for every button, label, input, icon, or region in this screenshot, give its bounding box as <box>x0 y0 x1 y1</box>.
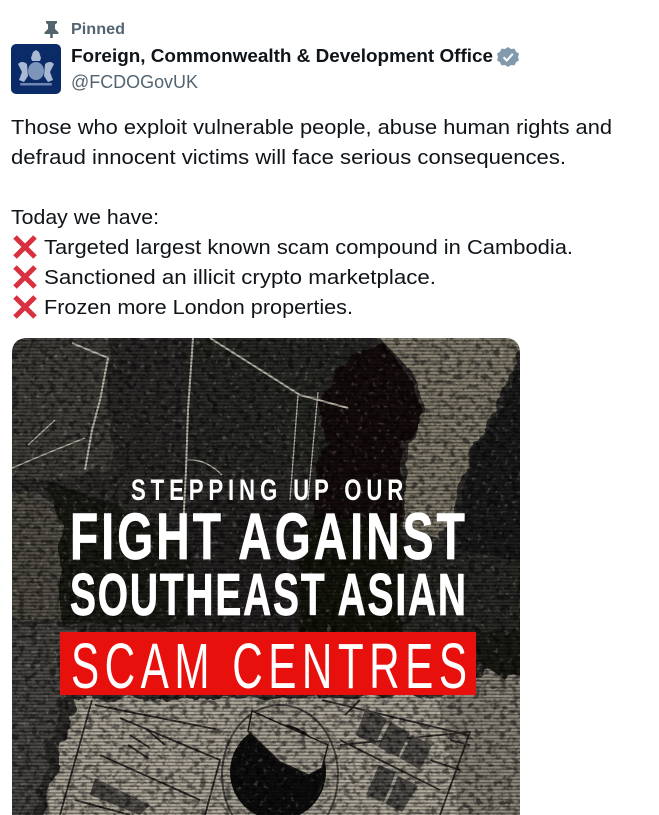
post text: defraud innocent victims will face serious consequences. <box>11 146 566 169</box>
island <box>248 711 328 775</box>
solar panels <box>356 708 432 812</box>
pinned label: Pinned <box>71 21 125 38</box>
ring road <box>222 705 338 815</box>
heading: stepping up our: STEPPING UP OUR <box>131 473 403 507</box>
icon: verified badge <box>497 47 519 67</box>
pond <box>230 724 326 815</box>
post text: Today we have: <box>11 206 159 229</box>
compound buildings <box>60 700 470 815</box>
heading: southeast asian: SOUTHEAST ASIAN <box>70 562 466 628</box>
account name: Foreign, Commonwealth & Development Office <box>71 45 493 66</box>
list item 3: Frozen more London properties. <box>44 296 353 319</box>
dark building strip <box>90 778 150 815</box>
aerial photo background <box>0 330 530 815</box>
campaign image <box>0 330 530 815</box>
pinned label <box>44 21 125 38</box>
post text: Those who exploit vulnerable people, abuse human rights and <box>11 116 612 139</box>
post text <box>11 116 612 319</box>
account handle: @FCDOGovUK <box>71 72 198 92</box>
banner: scam centres: SCAM CENTRES <box>71 631 467 702</box>
list item 1: Targeted largest known scam compound in Cambodia. <box>44 236 573 259</box>
icon: FCDO crest avatar <box>11 44 61 94</box>
tracks <box>12 338 348 530</box>
icon: pin <box>44 21 58 38</box>
list item 2: Sanctioned an illicit crypto marketplace. <box>44 266 436 289</box>
heading: fight against: FIGHT AGAINST <box>70 500 465 574</box>
